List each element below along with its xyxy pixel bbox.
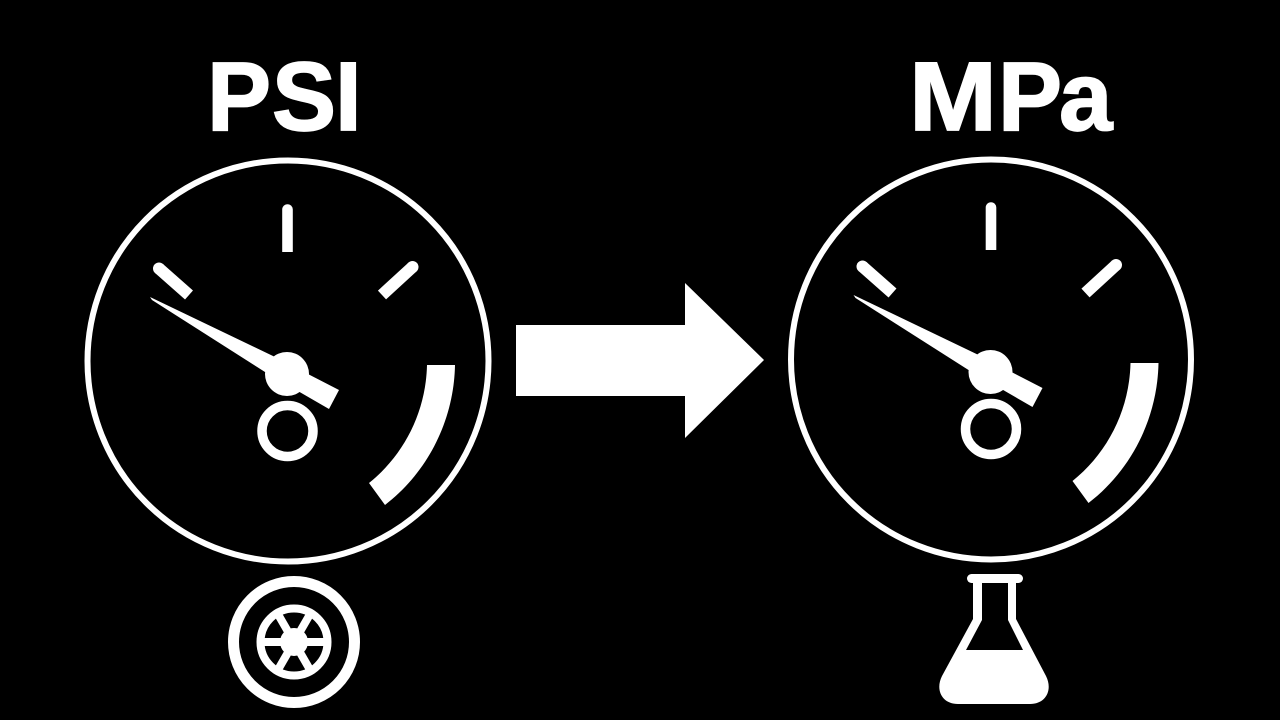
heading: PSI: PSI <box>207 41 362 151</box>
icon: laboratory flask <box>939 574 1049 704</box>
icon: tire <box>234 582 354 702</box>
heading: MPa: M <box>909 41 997 151</box>
icon: PSI pressure gauge <box>88 160 488 562</box>
icon: MPa pressure gauge <box>791 160 1191 560</box>
arrow: PSI to MPa <box>516 283 764 438</box>
heading: MPa: Pa <box>998 41 1113 151</box>
